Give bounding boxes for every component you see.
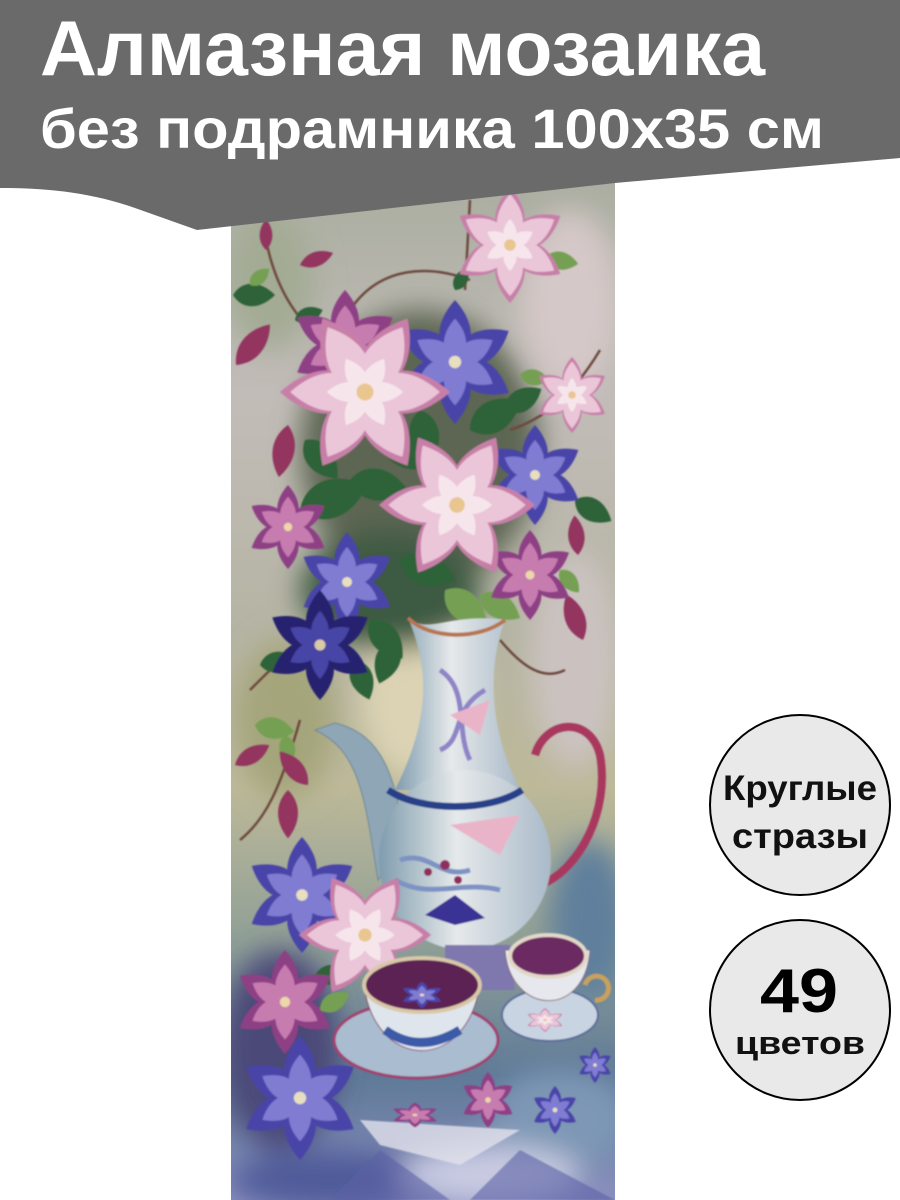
- buds: [260, 219, 272, 250]
- leaves: [233, 284, 275, 306]
- teapot: [315, 618, 602, 990]
- painting background tints: [220, 210, 630, 1200]
- title banner: [0, 0, 900, 230]
- badge: round rhinestones: [710, 715, 890, 895]
- title: main heading: Алмазная мозаика: [40, 4, 766, 92]
- badge: 49 colours: 49: [760, 957, 838, 1026]
- badge: round rhinestones: стразы: [732, 817, 868, 856]
- badge: 49 colours: цветов: [735, 1025, 865, 1061]
- panel: diamond mosaic painting: [220, 170, 630, 1200]
- flowers and tea cups at the base: [233, 837, 615, 1200]
- subtitle: size: без подрамника 100х35 см: [40, 97, 824, 160]
- badge: round rhinestones: Круглые: [723, 769, 877, 808]
- badge: 49 colours: [710, 920, 890, 1100]
- flowers: [458, 194, 561, 304]
- flower bouquet: [228, 187, 617, 840]
